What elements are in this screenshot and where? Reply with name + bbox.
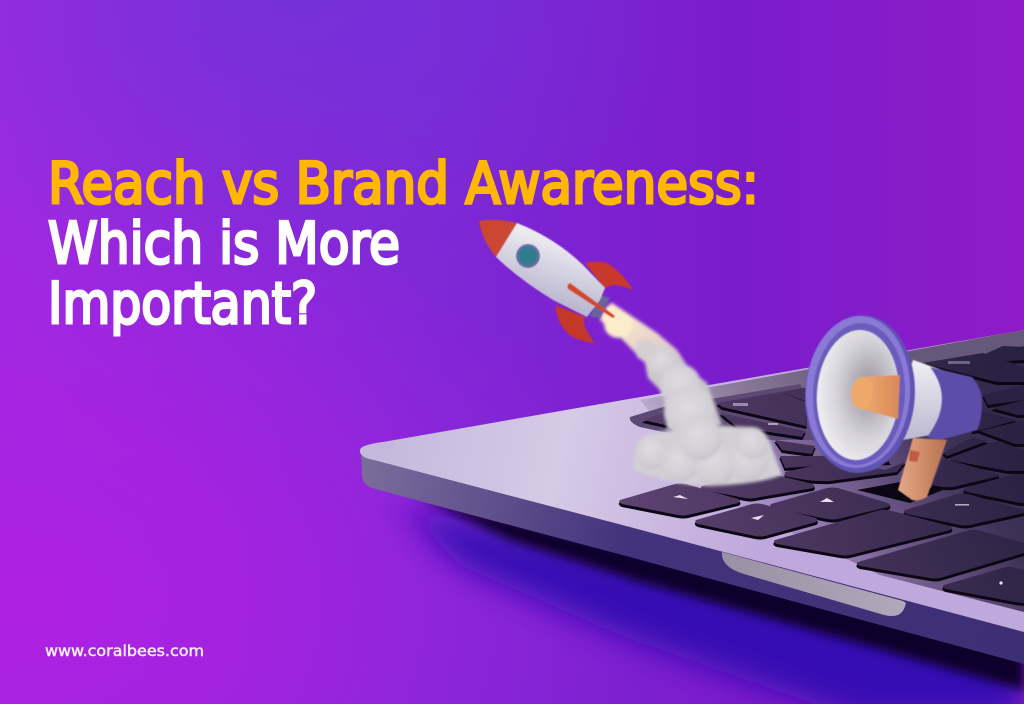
- rocket body: [496, 223, 605, 317]
- smoke base: [633, 416, 782, 486]
- keyboard recess: [660, 346, 1024, 612]
- title line 1: Reach vs Brand Awareness:: [48, 151, 759, 217]
- megaphone cone: [890, 360, 950, 440]
- laptop shadow core: [420, 497, 1024, 690]
- rocket center fin: [567, 283, 615, 318]
- title line 2: Which is More: [48, 211, 400, 277]
- rocket nose: [479, 220, 517, 257]
- megaphone rear band: [927, 367, 982, 440]
- laptop front edge: [361, 452, 1024, 664]
- laptop: [360, 330, 1024, 690]
- rocket fins: [585, 262, 633, 290]
- megaphone handle: [898, 438, 947, 501]
- rocket window: [516, 244, 540, 268]
- title line 3: Important?: [48, 271, 317, 337]
- trackpad notch: [722, 552, 906, 616]
- megaphone: [801, 312, 982, 501]
- website footer: www.coralbees.com: [45, 642, 204, 660]
- laptop deck: [360, 330, 1024, 632]
- keyboard keys: [619, 346, 1024, 606]
- handle socket: [857, 482, 943, 503]
- key arrow glyphs: [673, 361, 1003, 585]
- rocket nozzle: [590, 295, 610, 318]
- smoke trail: [600, 303, 782, 486]
- title: [48, 151, 759, 337]
- megaphone rim: [801, 312, 919, 476]
- megaphone horn interior: [814, 328, 902, 462]
- laptop shadow glow: [400, 505, 1024, 704]
- smoke column: [600, 303, 722, 438]
- rocket: [479, 220, 633, 343]
- megaphone mouthpiece: [862, 375, 900, 419]
